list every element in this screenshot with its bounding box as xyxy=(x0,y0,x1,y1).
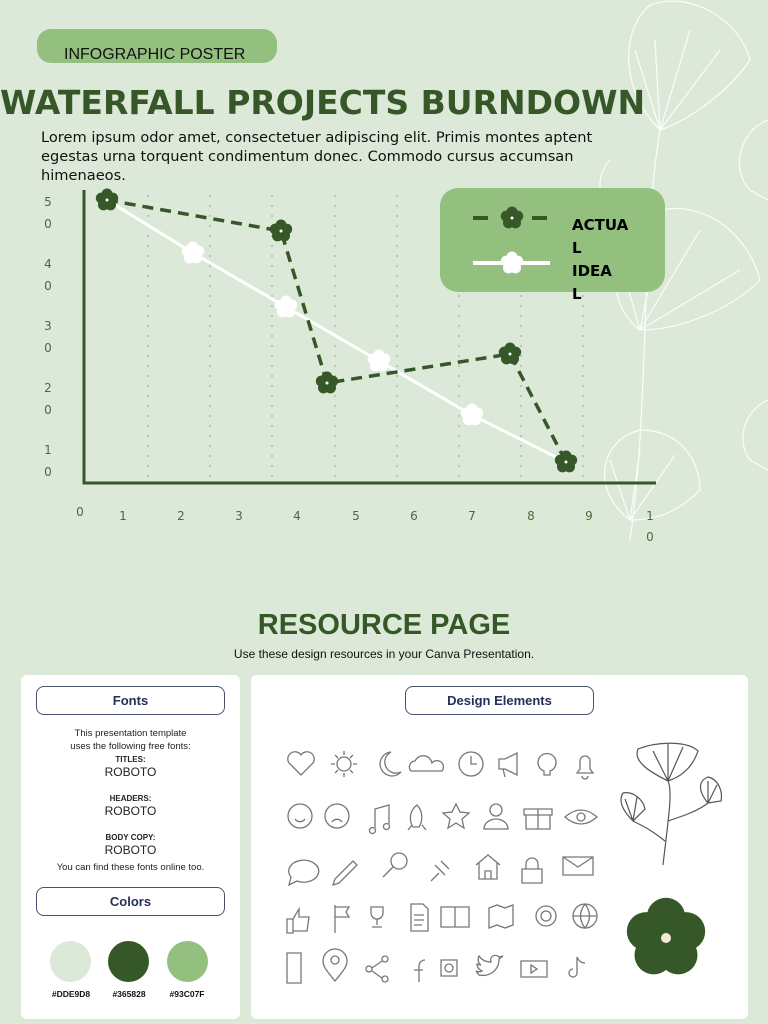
fonts text: uses the following free fonts: xyxy=(70,741,191,752)
chart: burndown: 9 xyxy=(585,509,593,523)
chart: burndown: 1 xyxy=(44,443,52,457)
fonts text: ROBOTO xyxy=(105,765,156,779)
panel: design elements xyxy=(251,675,748,1019)
title: WATERFALL PROJECTS BURNDOWN xyxy=(0,83,645,122)
legend: ACTUA L xyxy=(572,216,628,257)
chart: burndown: 0 xyxy=(44,465,52,479)
fonts pill xyxy=(36,686,225,715)
chart: burndown: 0 xyxy=(44,217,52,231)
chart: burndown: 2 xyxy=(44,381,52,395)
fonts text: BODY COPY: xyxy=(106,833,155,842)
chart: burndown: 1 xyxy=(646,509,654,523)
fonts text xyxy=(57,728,204,873)
decoration: ginkgo leaves xyxy=(600,0,768,540)
icon grid xyxy=(286,751,598,984)
subheading: Use these design resources in your Canva Presentation. xyxy=(234,647,534,661)
legend: IDEA L xyxy=(572,262,612,303)
fonts text: ROBOTO xyxy=(105,804,156,818)
chart: burndown: 7 xyxy=(468,509,476,523)
flower illustration xyxy=(626,898,706,974)
tag: infographic poster: INFOGRAPHIC POSTER xyxy=(64,46,245,63)
fonts text: You can find these fonts online too. xyxy=(57,862,204,873)
chart: burndown: 4 xyxy=(293,509,301,523)
colors pill xyxy=(36,887,225,916)
chart: burndown: 0 xyxy=(44,403,52,417)
color swatches xyxy=(50,941,208,999)
chart: burndown: 0 xyxy=(76,505,84,519)
chart: burndown: 3 xyxy=(235,509,243,523)
chart: burndown: 4 xyxy=(44,257,52,271)
fonts text: TITLES: xyxy=(115,755,146,764)
legend xyxy=(440,188,665,292)
chart: burndown: 6 xyxy=(410,509,418,523)
colors pill: Colors xyxy=(110,894,151,909)
chart: burndown: 0 xyxy=(44,279,52,293)
chart: burndown: 8 xyxy=(527,509,535,523)
chart: burndown: 3 xyxy=(44,319,52,333)
intro text: Lorem ipsum odor amet, consectetuer adipiscing elit. Primis montes aptent egestas urna torquent condimentum donec. Commodo cursus accumsan himenaeos. xyxy=(41,129,592,184)
ginkgo illustration xyxy=(620,742,722,866)
color swatches: #365828 xyxy=(112,989,146,999)
color swatches: #DDE9D8 xyxy=(52,989,90,999)
chart: burndown xyxy=(44,188,656,544)
design elements pill: Design Elements xyxy=(447,693,552,708)
design elements pill xyxy=(405,686,594,715)
chart: burndown: 5 xyxy=(352,509,360,523)
chart: burndown: 5 xyxy=(44,195,52,209)
panel: fonts and colors xyxy=(21,675,240,1019)
chart: burndown: 1 xyxy=(119,509,127,523)
color swatches: #93C07F xyxy=(170,989,204,999)
fonts text: This presentation template xyxy=(75,728,186,739)
heading: resource page: RESOURCE PAGE xyxy=(258,609,510,641)
chart: burndown: 0 xyxy=(646,530,654,544)
chart: burndown: 0 xyxy=(44,341,52,355)
fonts text: HEADERS: xyxy=(110,794,151,803)
chart: burndown: 2 xyxy=(177,509,185,523)
fonts pill: Fonts xyxy=(113,693,148,708)
fonts text: ROBOTO xyxy=(105,843,156,857)
tag: infographic poster xyxy=(37,29,277,63)
